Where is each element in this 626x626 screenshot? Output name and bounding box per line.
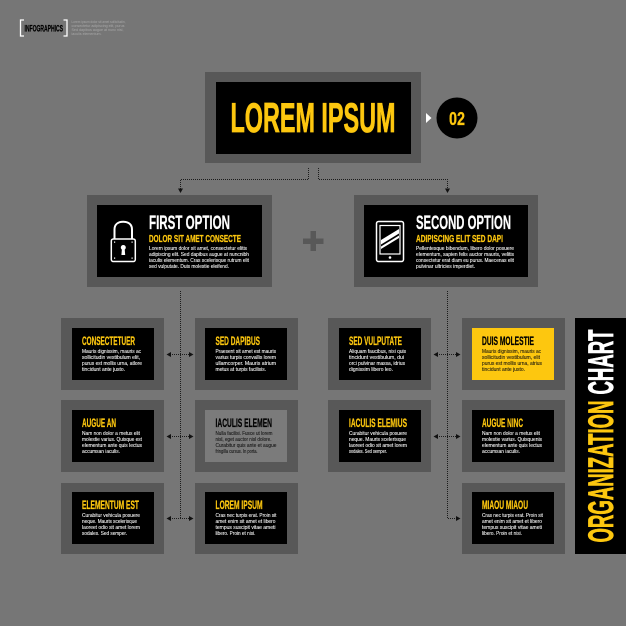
option heading: SECOND OPTION — [416, 213, 511, 234]
card: elementum est: laoreet odio sit amet lorem — [82, 525, 140, 531]
header tag: infographics: Lorem ipsum dolor sit amet sollicitudin, — [72, 20, 126, 24]
option body text — [149, 246, 250, 270]
card: iaculis elemius: neque. Mauris scelerisque — [349, 437, 406, 443]
number badge 02 — [426, 98, 478, 138]
card: consectetuer: purus est mollis urna, atlore — [82, 361, 142, 367]
card: elementum est: Curabitur vehicula posuere — [82, 513, 140, 519]
card: miaou miaou — [462, 483, 565, 554]
card: iaculis elemius: Curabitur vehicula posuere — [349, 431, 407, 437]
card: lorem ipsum: amet enim sit amet et libero — [216, 519, 276, 525]
card: miaou miaou: Cras nec turpis erat. Proin sit — [482, 513, 544, 519]
card: sed vulputate: tincidunt vestibulum, dui — [349, 355, 404, 361]
card: lorem ipsum: libero. Proin et nisi. — [216, 531, 256, 537]
card: duis molestie (highlighted): Mauris dignissim, mauris ac — [482, 349, 541, 355]
card: augue an: molestie varius. Quisque est — [82, 437, 143, 443]
vertical banner: organization chart: ORGANIZATION — [582, 401, 621, 542]
card: miaou miaou: MIAOU MIAOU — [482, 500, 528, 512]
vertical banner: organization chart — [575, 318, 626, 554]
option body text: pulvinar ultricies imperdiet. — [416, 264, 475, 270]
card: iaculis elemius: laoreet odio sit amet lorem — [349, 443, 407, 449]
card: augue ninc: Nam non dolor a metus elit — [482, 431, 541, 437]
header tag: infographics: consectetur adipiscing elit, purus — [72, 24, 125, 28]
panel: first option — [87, 195, 272, 287]
option body text: Pellentesque bibendum, libero dolor posuere — [416, 246, 514, 252]
card: miaou miaou: tempus suscipit vitae ameti — [482, 525, 542, 531]
icon: padlock — [111, 222, 135, 262]
card: miaou miaou: amet enim sit amet et libero — [482, 519, 542, 525]
option body text: elementum, sapien felis auctor mauris, velitis — [416, 252, 514, 258]
card: iaculis elemen (muted): IACULIS ELEMEN — [216, 418, 272, 430]
card: iaculis elemen (muted): Curabitur quis ante et augue — [216, 443, 277, 449]
header tag: infographics: Sed dapibus augue at nunc nisl, — [72, 28, 124, 32]
card: iaculis elemius: sodales. Sed semper. — [349, 449, 387, 455]
header tag: infographics: INFOGRAPHICS — [24, 24, 63, 34]
title: LOREM IPSUM — [230, 94, 396, 141]
card: augue an: AUGUE AN — [82, 418, 116, 430]
icon: tablet — [376, 222, 404, 262]
card: duis molestie (highlighted): purus est mollis urna, atrius — [482, 361, 542, 367]
option subheading: ADIPISCING ELIT SED DAPI — [416, 234, 503, 245]
card: iaculis elemen (muted) — [195, 400, 298, 472]
card: sed dapibus: Praesent sit amet est mauris — [216, 349, 276, 355]
card: sed dapibus: metus at turpis facilisis. — [216, 367, 266, 373]
card: duis molestie (highlighted): DUIS MOLESTIE — [482, 336, 534, 348]
card: augue an: accumsan iaculis. — [82, 449, 120, 455]
card: augue an — [61, 400, 164, 472]
card: augue ninc — [462, 400, 565, 472]
card: iaculis elemen (muted): Nulla facilisi. Fusce ut lorem — [216, 431, 272, 437]
card: augue ninc: elementum ante quis lectus — [482, 443, 542, 449]
card: elementum est — [61, 483, 164, 554]
panel: second option — [354, 195, 538, 287]
card: sed dapibus: SED DAPIBUS — [216, 336, 260, 348]
vertical banner: organization chart: CHART — [582, 330, 621, 394]
card: duis molestie (highlighted): sollicitudin vestibulum, elit — [482, 355, 541, 361]
connector lines from title to options — [178, 168, 450, 193]
panel: main title — [205, 72, 421, 163]
card: consectetuer: CONSECTETUER — [82, 336, 135, 348]
card: sed vulputate — [328, 318, 431, 390]
card: consectetuer: Mauris dignissim, mauris ac — [82, 349, 141, 355]
connector tree: second option — [434, 291, 460, 521]
card: consectetuer: tincidunt ante justo. — [82, 367, 125, 373]
card: augue ninc: accumsan iaculis. — [482, 449, 520, 455]
card: sed dapibus — [195, 318, 298, 390]
card: augue an: elementum ante quis lectus — [82, 443, 142, 449]
card: iaculis elemius: IACULIS ELEMIUS — [349, 418, 407, 430]
card: iaculis elemen (muted): nisl, eget auctor nisl dolore. — [216, 437, 272, 443]
option body text: iaculis elementum. Cras scelerisque rutrum elit — [149, 258, 250, 264]
option body text: sed vulputate. Duis molestie eleifend. — [149, 264, 229, 270]
card: duis molestie (highlighted): tincidunt ante justo. — [482, 367, 525, 373]
card: elementum est: sodales. Sed semper. — [82, 531, 127, 537]
option heading: FIRST OPTION — [149, 213, 230, 234]
header tag: infographics — [20, 20, 126, 36]
card: augue an: Nam non dolor a metus elit — [82, 431, 141, 437]
option body text — [416, 246, 515, 270]
card: lorem ipsum: Cras nec turpis erat. Proin sit — [216, 513, 277, 519]
option body text: consectetur erat diam eu purus. Maecenas elit — [416, 258, 515, 264]
card: augue ninc: AUGUE NINC — [482, 418, 523, 430]
card: consectetuer — [61, 318, 164, 390]
card: lorem ipsum: tempus suscipit vitae ameti — [216, 525, 276, 531]
card: iaculis elemen (muted): fringilla cursus. In porta. — [216, 449, 258, 455]
option body text: adipiscing elit. Sed dapibus augue at nuncnibh — [149, 252, 249, 258]
card: miaou miaou: libero. Proin et nisi. — [482, 531, 522, 537]
number badge 02: 02 — [449, 109, 465, 129]
connector tree: first option — [166, 291, 194, 521]
card: sed vulputate: orci pulvinar massa, idrius — [349, 361, 405, 367]
card: augue ninc: molestie varius. Quisquenis — [482, 437, 542, 443]
card: elementum est: neque. Mauris scelerisque — [82, 519, 137, 525]
card: duis molestie (highlighted) — [462, 318, 565, 390]
card: sed vulputate: SED VULPUTATE — [349, 336, 402, 348]
card: iaculis elemius — [328, 400, 431, 472]
option body text: Lorem ipsum dolor sit amet, consectetur elitis — [149, 246, 247, 252]
card: elementum est: ELEMENTUM EST — [82, 500, 139, 512]
card: sed vulputate: Aliquam faucibus, nisi quis — [349, 349, 406, 355]
card: lorem ipsum — [195, 483, 298, 554]
card: sed dapibus: ullamcorper. Mauris atrium — [216, 361, 276, 367]
card: sed dapibus: varius turpis convallis lorem — [216, 355, 276, 361]
card: sed vulputate: dignissim libero leo. — [349, 367, 393, 373]
plus sign — [303, 231, 324, 251]
card: consectetuer: sollicitudin vestibulum elit, — [82, 355, 140, 361]
header tag: infographics: iaculis elementum. — [72, 32, 102, 36]
option subheading: DOLOR SIT AMET CONSECTE — [149, 234, 241, 245]
card: lorem ipsum: LOREM IPSUM — [216, 500, 262, 512]
